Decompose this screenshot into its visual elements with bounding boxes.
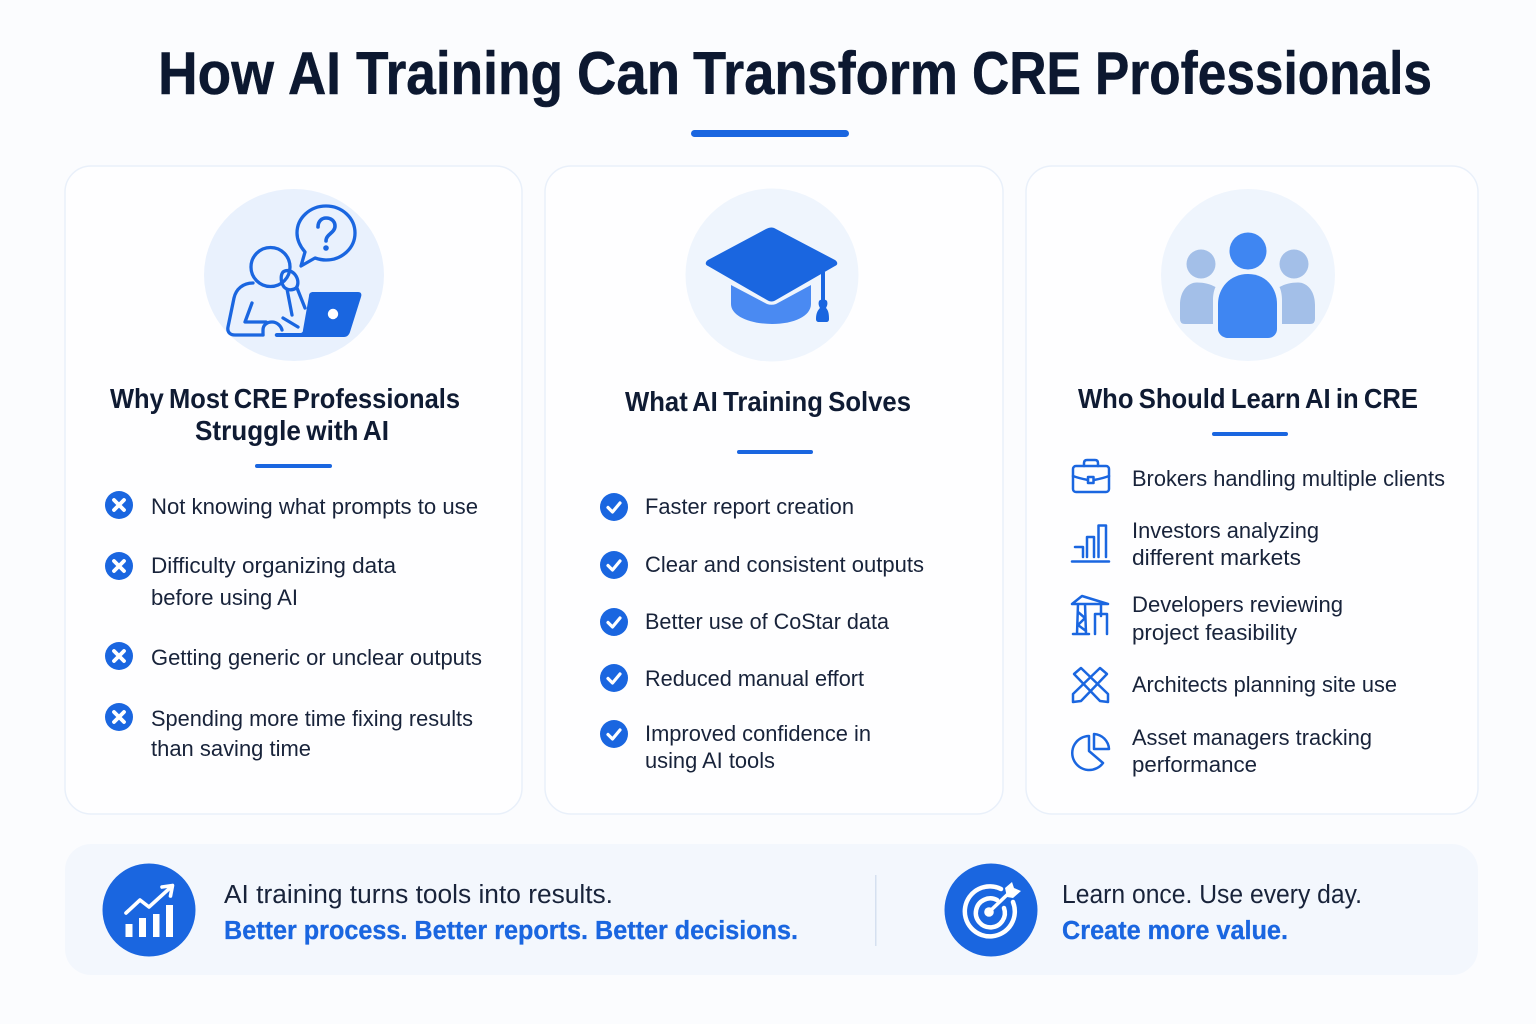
title: Professionals <box>1095 40 1432 107</box>
heading: why struggle: Why Most CRE Professionals <box>110 383 460 414</box>
panel: bottom banner <box>65 844 1478 975</box>
icon: crossed rulers <box>1073 668 1108 702</box>
list: audiences: Asset managers tracking <box>1132 725 1372 750</box>
heading: who should learn: Who Should Learn AI in CRE <box>1078 383 1418 414</box>
title underline <box>691 130 849 137</box>
icon: graduation cap <box>686 188 858 362</box>
title: How <box>158 40 274 107</box>
list: benefits: Better use of CoStar data <box>645 609 890 634</box>
icon: briefcase <box>1073 460 1109 492</box>
icon: group of people <box>1161 189 1335 361</box>
list: struggles: Difficulty organizing data <box>151 553 397 578</box>
list: struggles <box>105 491 482 761</box>
panel: why professionals struggle <box>65 166 522 814</box>
list: audiences: Brokers handling multiple clients <box>1132 466 1445 491</box>
icon: pie chart <box>1072 734 1109 770</box>
list: benefits <box>600 493 924 773</box>
text: value message: Create more value. <box>1062 917 1288 945</box>
icon: target with arrow <box>944 864 1038 956</box>
title: Can <box>577 40 680 107</box>
list: benefits: Faster report creation <box>645 494 854 519</box>
title: CRE <box>972 40 1081 107</box>
list: struggles: Getting generic or unclear outputs <box>151 645 482 670</box>
title: AI <box>288 40 341 107</box>
title: Transform <box>693 40 958 107</box>
text: results message: AI training turns tools into results. <box>224 881 613 909</box>
heading: solves: What AI Training Solves <box>625 386 911 417</box>
icon: confused person at laptop <box>204 189 384 361</box>
list: benefits: Clear and consistent outputs <box>645 552 924 577</box>
list: audiences: Architects planning site use <box>1132 672 1397 697</box>
panel: who should learn <box>1026 166 1478 814</box>
heading: why struggle <box>110 383 460 446</box>
list: benefits: Improved confidence in <box>645 721 871 746</box>
list: struggles: Not knowing what prompts to use <box>151 494 478 519</box>
text: value message <box>1062 881 1362 945</box>
list: benefits: using AI tools <box>645 748 775 773</box>
panel: what training solves <box>545 166 1003 814</box>
list: audiences <box>1072 460 1445 777</box>
icon: growth chart <box>102 864 196 956</box>
list: struggles: Spending more time fixing results <box>151 706 473 731</box>
title <box>158 40 1432 107</box>
list: struggles: before using AI <box>151 585 298 610</box>
title: Training <box>356 40 563 107</box>
list: audiences: Investors analyzing <box>1132 518 1319 543</box>
list: audiences: different markets <box>1132 545 1301 570</box>
icon: crane <box>1072 596 1108 634</box>
heading: why struggle: Struggle with AI <box>195 415 389 446</box>
text: value message: Learn once. Use every day. <box>1062 881 1362 909</box>
list: audiences: project feasibility <box>1132 620 1297 645</box>
list: benefits: Reduced manual effort <box>645 666 864 691</box>
text: results message: Better process. Better reports. Better decisions. <box>224 917 798 945</box>
icon: bar chart <box>1072 526 1109 562</box>
list: audiences: performance <box>1132 752 1257 777</box>
list: struggles: than saving time <box>151 736 311 761</box>
text: results message <box>224 881 798 945</box>
list: audiences: Developers reviewing <box>1132 592 1343 617</box>
